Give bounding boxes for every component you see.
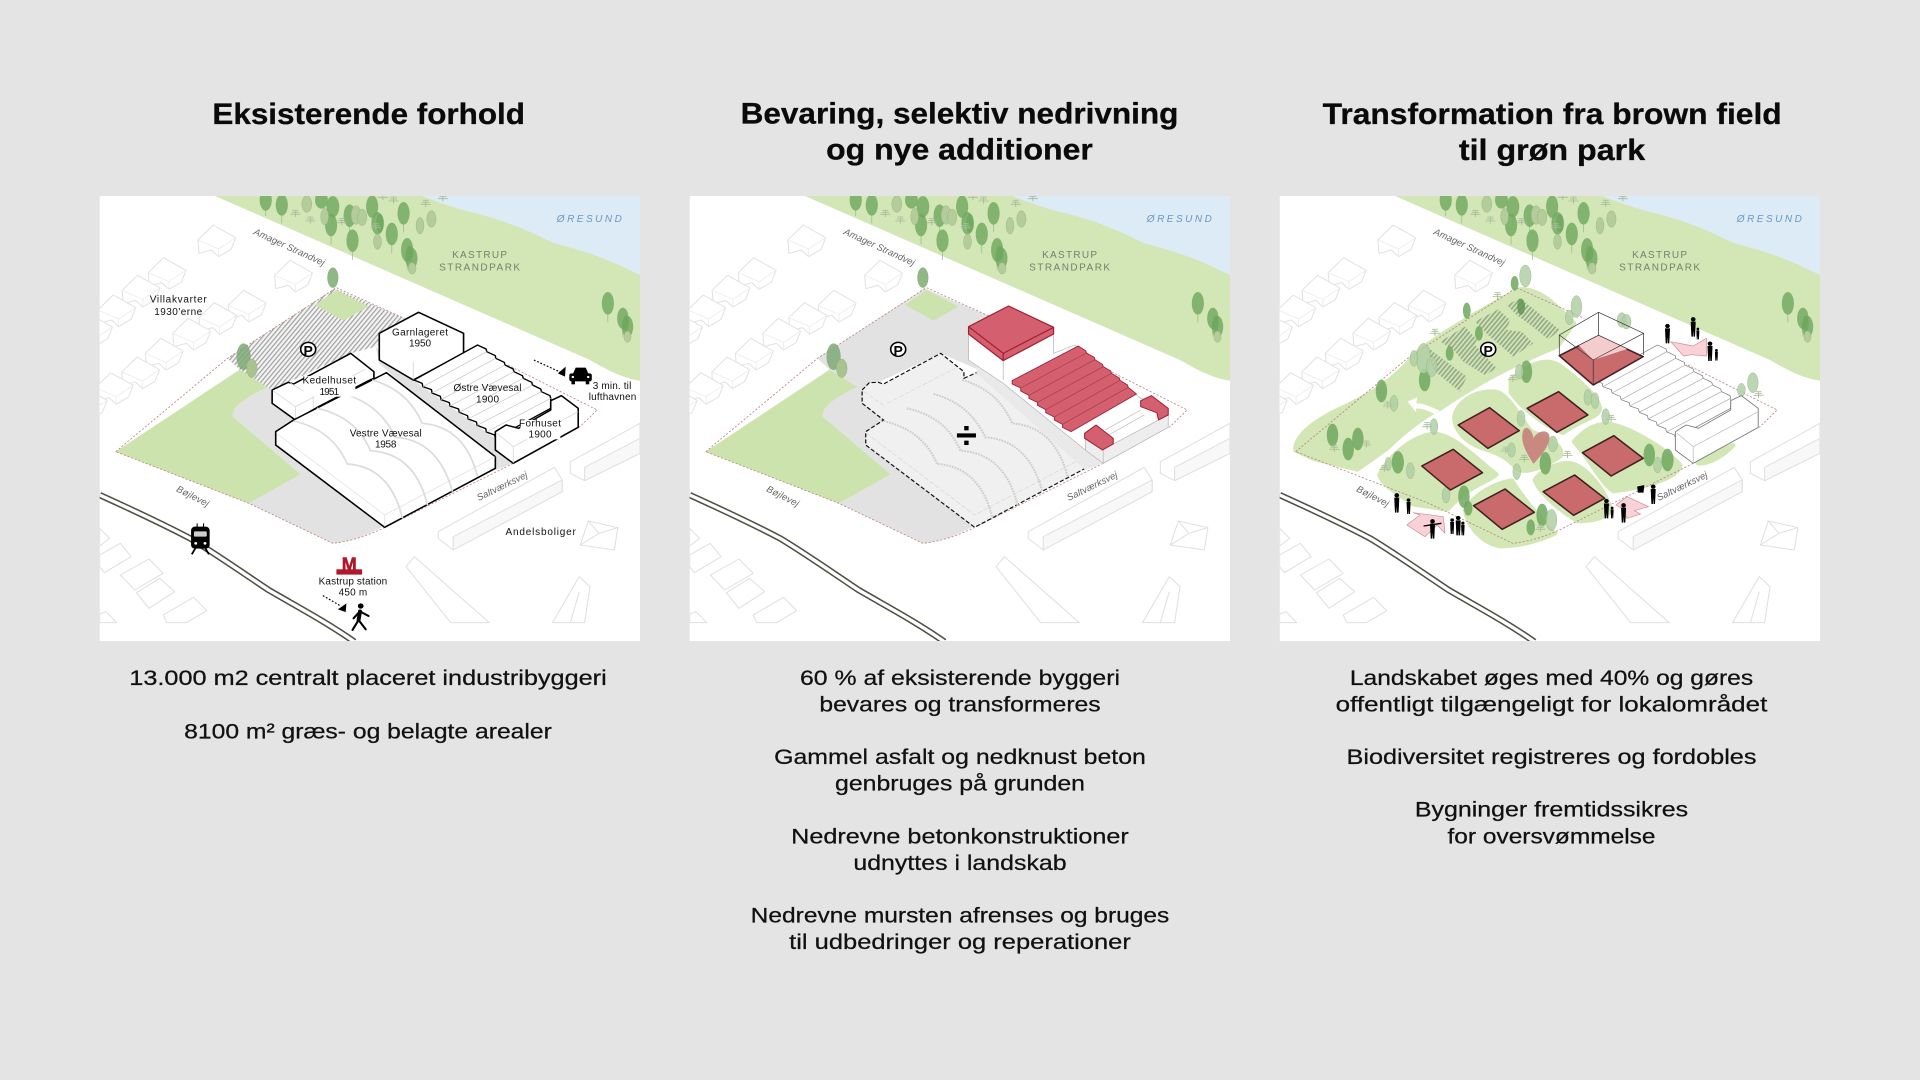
labels: buildings: Østre Vævesal — [454, 383, 522, 394]
text block: column 3 — [1336, 667, 1768, 848]
labels: water and park: KASTRUP — [452, 250, 507, 261]
labels: buildings: Forhuset — [519, 419, 561, 430]
labels: water and park: STRANDPARK — [1619, 263, 1700, 274]
labels: roads: Saltværksvej — [1655, 469, 1710, 504]
red roof: Østre Vævesal — [1012, 346, 1136, 432]
title: column 3: til grøn park — [1459, 134, 1645, 167]
parking surface — [817, 288, 994, 390]
labels: water and park: STRANDPARK — [439, 263, 520, 274]
base map: park, water, houses, railway — [69, 189, 640, 642]
trees — [1327, 276, 1674, 535]
labels: buildings: 3 min. til — [593, 381, 631, 392]
label: P: P — [894, 342, 903, 358]
title: column 2 — [741, 98, 1178, 166]
labels: buildings — [150, 295, 636, 599]
park areas — [1296, 289, 1733, 546]
labels: roads — [1354, 226, 1710, 510]
text block: column 2: Nedrevne betonkonstruktioner — [791, 825, 1129, 848]
site boundary — [1296, 288, 1777, 543]
icon: train — [191, 523, 210, 554]
labels: water and park: ØRESUND — [556, 214, 622, 225]
icon: parking — [891, 342, 906, 356]
labels: buildings: Vestre Vævesal — [350, 428, 422, 439]
text block: column 1 — [129, 667, 607, 743]
text block: column 2 — [751, 667, 1169, 954]
entry trees — [236, 268, 338, 378]
labels: water and park: KASTRUP — [1042, 250, 1097, 261]
arrow: to the airport — [534, 360, 566, 377]
labels: buildings: Andelsboliger — [506, 527, 577, 538]
arrow: to the station — [323, 596, 346, 612]
icon: metro logo: M — [342, 554, 357, 574]
labels: buildings: 1951 — [320, 387, 340, 398]
entry trees — [826, 268, 928, 378]
paved area — [823, 387, 973, 543]
labels: buildings: 1900 — [528, 430, 552, 441]
labels: roads: Saltværksvej — [475, 469, 530, 504]
icon: parking — [1481, 342, 1496, 356]
labels: roads: Saltværksvej — [1065, 469, 1120, 504]
icon: parking — [301, 342, 316, 356]
text block: column 2: udnyttes i landskab — [853, 852, 1067, 875]
panel: existing conditions map — [69, 189, 640, 642]
icon: metro logo — [336, 554, 362, 575]
text block: column 3: offentligt tilgængeligt for lokalområdet — [1336, 694, 1768, 717]
grass area — [116, 369, 301, 503]
preserved walls — [969, 334, 1168, 463]
bushes — [1329, 293, 1764, 532]
labels: roads: Bøjlevej — [1354, 484, 1391, 510]
labels: water and park: KASTRUP — [1632, 250, 1687, 261]
label backings behind building names — [304, 376, 560, 439]
grass area — [706, 369, 891, 503]
text block: column 2: bevares og transformeres — [819, 694, 1101, 717]
people silhouettes — [1394, 317, 1718, 539]
labels: buildings: 1950 — [409, 339, 431, 350]
labels: buildings: Garnlageret — [392, 328, 448, 339]
labels: buildings: 1930'erne — [154, 307, 203, 318]
icon: pedestrian — [352, 603, 369, 630]
label: P: P — [1484, 342, 1493, 358]
pink entrance arrows — [1407, 338, 1706, 537]
building: Vestre Vævesal — [276, 373, 495, 527]
labels: buildings: 1900 — [476, 394, 499, 405]
labels: water and park — [1029, 214, 1212, 274]
strip between halls — [376, 347, 513, 470]
building: Garnlageret — [379, 312, 464, 380]
red roof: Forhuset tower — [1141, 396, 1168, 420]
labels: roads: Bøjlevej — [764, 484, 801, 510]
building: Kedelhuset — [272, 353, 374, 420]
red roof: Forhuset wing — [1085, 425, 1113, 450]
label: P: P — [304, 342, 313, 358]
strip between halls — [976, 363, 1103, 470]
icon: division sign: ÷ — [956, 415, 977, 457]
demolished buildings: dashed outline — [862, 353, 1085, 527]
paved area — [233, 387, 383, 543]
preserved Østre Vævesal — [1594, 345, 1731, 438]
labels: roads: Amager Strandvej — [1431, 226, 1507, 269]
labels: water and park — [1619, 214, 1802, 274]
labels: roads: Amager Strandvej — [251, 226, 327, 269]
site boundary — [116, 288, 597, 543]
white entrance arrow — [1407, 397, 1440, 414]
text block: column 3: Biodiversitet registreres og fordobles — [1346, 746, 1756, 769]
text block: column 3: Bygninger fremtidssikres — [1415, 799, 1688, 822]
labels: roads — [174, 226, 530, 510]
labels: water and park: ØRESUND — [1146, 214, 1212, 225]
text block: column 1: 13.000 m2 centralt placeret industribyggeri — [129, 667, 607, 690]
transparent volume on red footprint — [1559, 312, 1644, 385]
base map: park, water, houses, railway — [1249, 189, 1820, 642]
title: column 3: Transformation fra brown field — [1323, 98, 1782, 131]
panel: green park map — [1249, 189, 1820, 642]
text block: column 2: Gammel asfalt og nedknust beton — [774, 746, 1146, 769]
building: Forhuset — [495, 396, 578, 463]
labels: buildings: Kedelhuset — [302, 375, 356, 386]
labels: buildings: 450 m — [339, 588, 367, 599]
heart — [1522, 428, 1549, 464]
labels: water and park — [439, 214, 622, 274]
title: column 2: Bevaring, selektiv nedrivning — [741, 98, 1178, 130]
base map: park, water, houses, railway — [659, 189, 1230, 642]
building: Østre Vævesal — [414, 345, 551, 438]
text block: column 3: for oversvømmelse — [1448, 825, 1656, 848]
panel: preservation and demolition map — [659, 189, 1230, 642]
labels: buildings: 1958 — [375, 440, 397, 451]
text block: column 2: genbruges på grunden — [835, 773, 1085, 796]
small lawn — [315, 290, 369, 321]
title: column 3 — [1323, 98, 1782, 167]
labels: water and park: STRANDPARK — [1029, 263, 1110, 274]
site boundary — [706, 288, 1187, 543]
icon: car — [569, 368, 592, 384]
labels: roads — [764, 226, 1120, 510]
hatched parking patches — [1427, 298, 1560, 392]
labels: buildings: Villakvarter — [150, 295, 207, 306]
text block: column 1: 8100 m² græs- og belagte arealer — [184, 720, 552, 743]
text block: column 3: Landskabet øges med 40% og gøres — [1350, 667, 1753, 690]
labels: roads: Bøjlevej — [174, 484, 211, 510]
preserved Forhuset — [1675, 396, 1758, 463]
text block: column 2: Nedrevne mursten afrenses og bruges — [751, 904, 1169, 927]
parking hatch — [227, 288, 404, 390]
red plots — [1422, 392, 1643, 529]
text block: column 2: til udbedringer og reperationer — [789, 931, 1131, 954]
labels: buildings: lufthavnen — [589, 392, 636, 403]
red roof: Garnlageret — [969, 306, 1054, 361]
labels: roads: Amager Strandvej — [841, 226, 917, 269]
labels: buildings: Kastrup station — [319, 577, 387, 588]
title: column 1: Eksisterende forhold — [212, 98, 525, 131]
labels: water and park: ØRESUND — [1736, 214, 1802, 225]
text block: column 2: 60 % af eksisterende byggeri — [800, 667, 1120, 690]
title: column 2: og nye additioner — [826, 134, 1093, 166]
small lawn — [905, 290, 959, 321]
